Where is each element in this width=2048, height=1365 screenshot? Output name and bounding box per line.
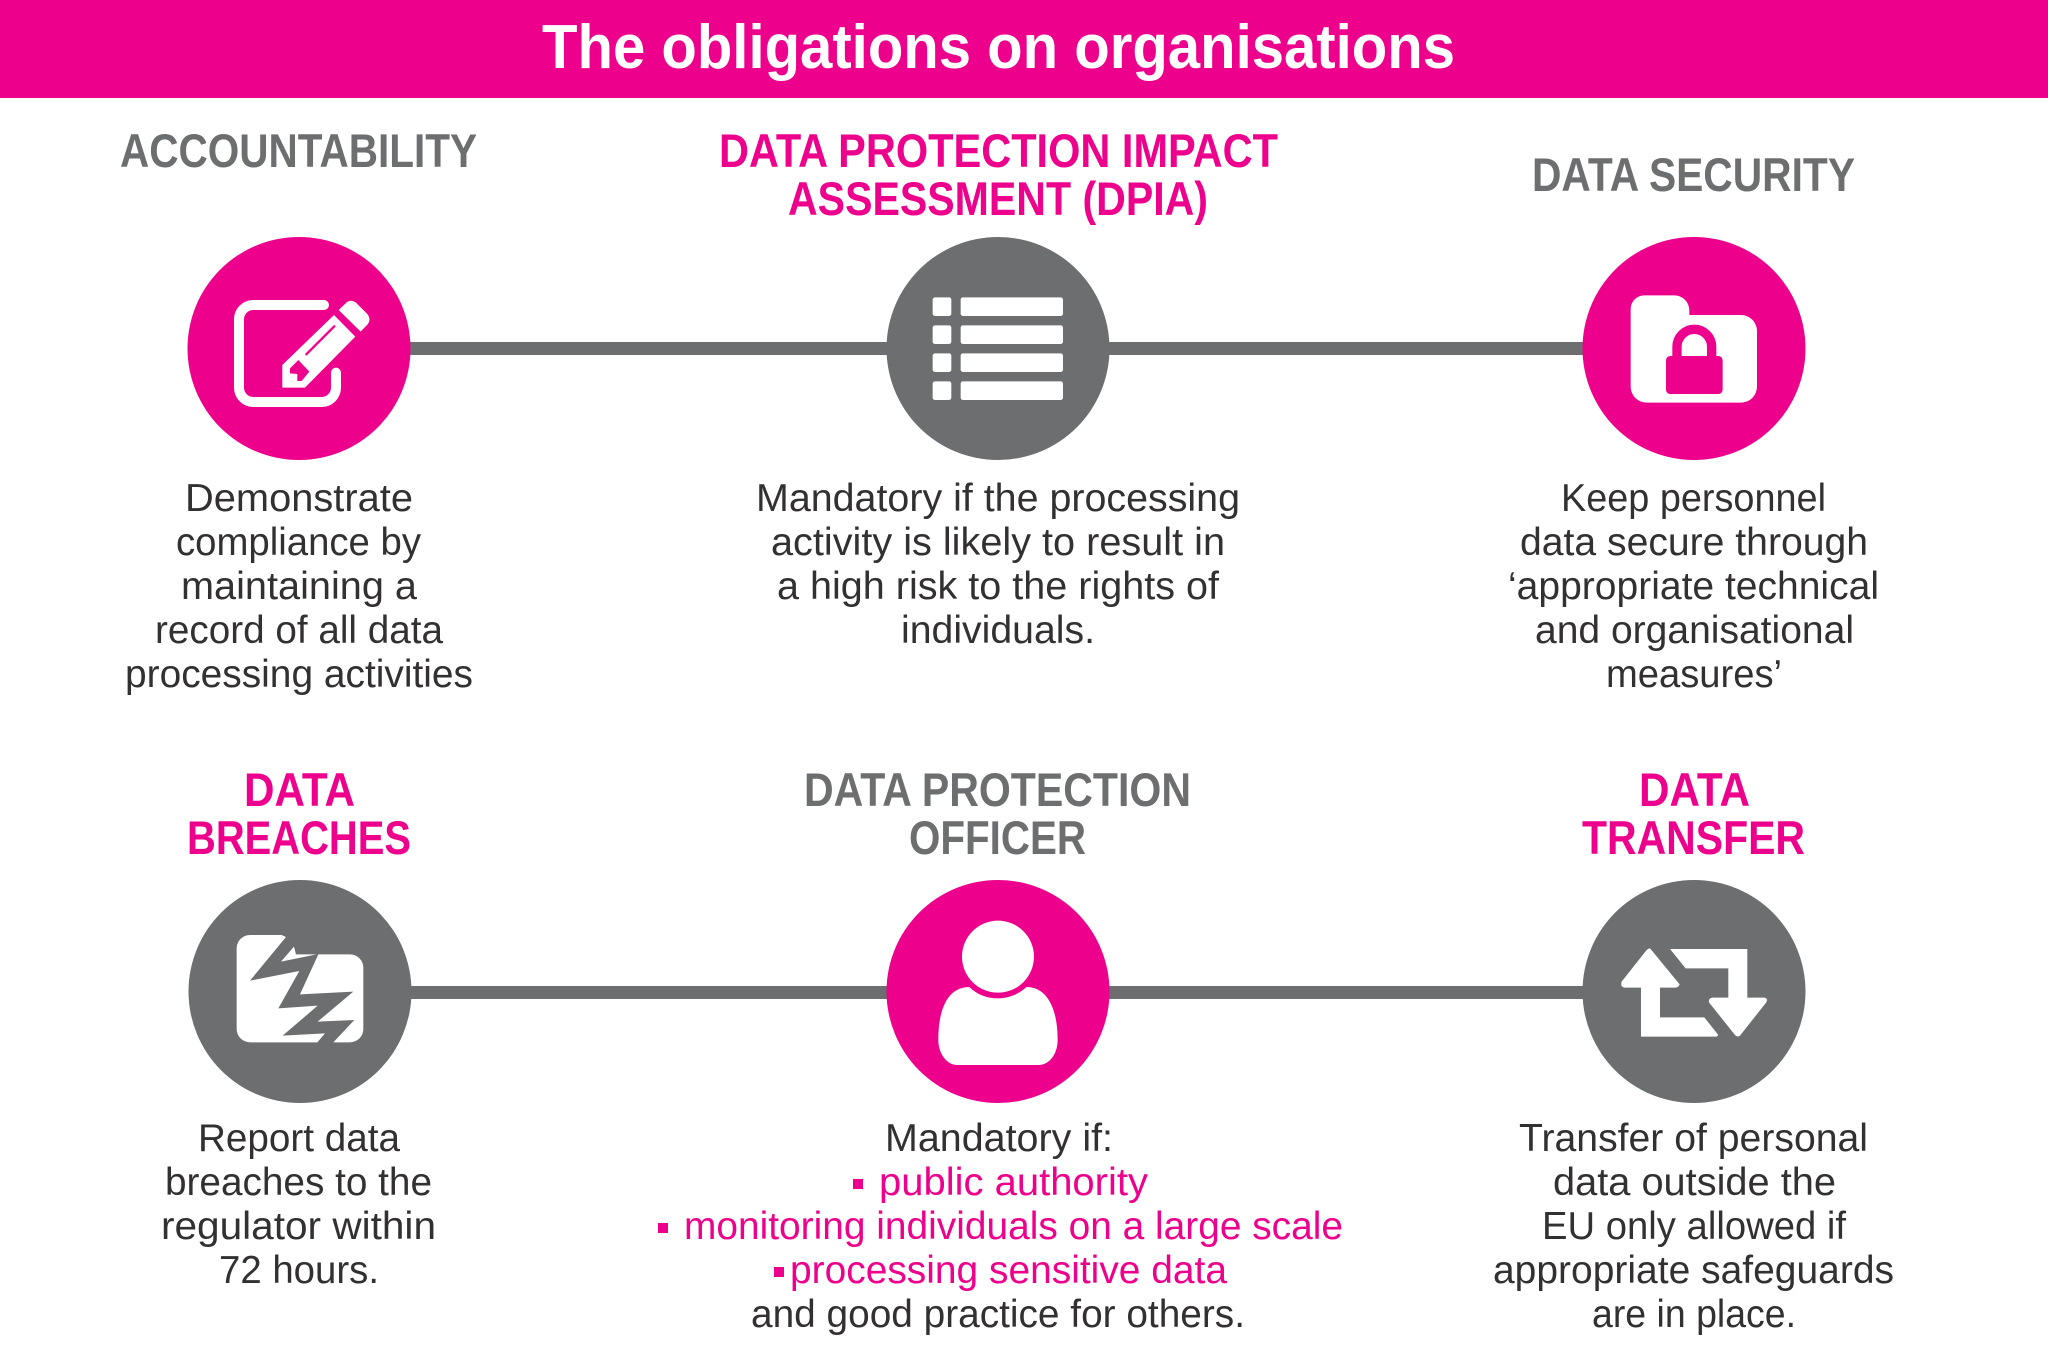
text: data breaches — [161, 1117, 436, 1292]
text: data protection officer — [658, 1117, 1343, 1336]
title: The obligations on organisations — [542, 13, 1455, 82]
text: data transfer — [1493, 1117, 1894, 1336]
text: DPIA: activity is likely to result in — [771, 521, 1225, 564]
text: accountability: processing activities — [125, 653, 473, 696]
text: data transfer: appropriate safeguards — [1493, 1249, 1894, 1292]
text: data protection officer: and good practice for others. — [751, 1293, 1245, 1336]
text: accountability: compliance by — [176, 521, 421, 564]
text: DPIA: Mandatory if the processing — [756, 477, 1240, 520]
heading: DPIA: ASSESSMENT (DPIA) — [788, 172, 1208, 225]
icon: locked folder — [1582, 237, 1806, 460]
icon: cracked card — [188, 880, 412, 1103]
text: DPIA: a high risk to the rights of — [777, 565, 1219, 608]
text: data breaches: Report data — [198, 1117, 400, 1160]
heading: accountability: ACCOUNTABILITY — [120, 124, 477, 177]
panel: data protection officer — [658, 763, 1343, 1336]
text: data security: Keep personnel — [1561, 477, 1826, 520]
heading: data transfer: TRANSFER — [1582, 811, 1805, 864]
icon: pencil on pad — [188, 237, 410, 460]
header banner — [0, 0, 2048, 98]
text: data protection officer: monitoring individuals on a large scale — [684, 1205, 1343, 1248]
heading: data protection officer: OFFICER — [909, 811, 1086, 864]
heading: data protection officer — [804, 763, 1191, 864]
panel: DPIA — [719, 124, 1278, 652]
text: data protection officer: processing sensitive data — [790, 1249, 1227, 1292]
heading: data transfer — [1582, 763, 1805, 864]
text: data breaches: regulator within — [161, 1205, 436, 1248]
heading: data transfer: DATA — [1639, 763, 1750, 816]
text: accountability: record of all data — [155, 609, 443, 652]
heading: data breaches: BREACHES — [187, 811, 411, 864]
text: data transfer: Transfer of personal — [1519, 1117, 1868, 1160]
text: data security: ‘appropriate technical — [1508, 565, 1879, 608]
text: data transfer: are in place. — [1592, 1293, 1796, 1336]
heading: data protection officer: DATA PROTECTION — [804, 763, 1191, 816]
heading: data breaches: DATA — [244, 763, 355, 816]
text: accountability: Demonstrate — [185, 477, 413, 520]
text: data breaches: breaches to the — [165, 1161, 432, 1204]
text: DPIA — [756, 477, 1240, 652]
text: data security: measures’ — [1606, 653, 1782, 696]
text: DPIA: individuals. — [901, 609, 1095, 652]
panel: data breaches — [161, 763, 436, 1292]
icon: transfer arrows — [1582, 880, 1806, 1103]
icon: person — [886, 880, 1110, 1103]
text: data transfer: data outside the — [1553, 1161, 1836, 1204]
text: data security: data secure through — [1520, 521, 1868, 564]
heading: DPIA — [719, 124, 1278, 225]
heading: data breaches — [187, 763, 411, 864]
text: data breaches: 72 hours. — [219, 1249, 379, 1292]
heading: DPIA: DATA PROTECTION IMPACT — [719, 124, 1278, 177]
text: accountability: maintaining a — [181, 565, 417, 608]
text: data protection officer: Mandatory if: — [885, 1117, 1113, 1160]
connector line: top row — [400, 342, 1600, 355]
text: data transfer: EU only allowed if — [1542, 1205, 1846, 1248]
icon: list — [886, 237, 1110, 460]
text: accountability — [125, 477, 473, 696]
text: data protection officer: public authority — [879, 1161, 1149, 1204]
connector line: bottom row — [400, 986, 1600, 999]
heading: data security: DATA SECURITY — [1532, 148, 1855, 201]
panel: data transfer — [1493, 763, 1894, 1336]
panel: accountability — [120, 124, 477, 696]
panel: data security — [1508, 148, 1879, 696]
text: data security: and organisational — [1535, 609, 1854, 652]
text: data security — [1508, 477, 1879, 696]
